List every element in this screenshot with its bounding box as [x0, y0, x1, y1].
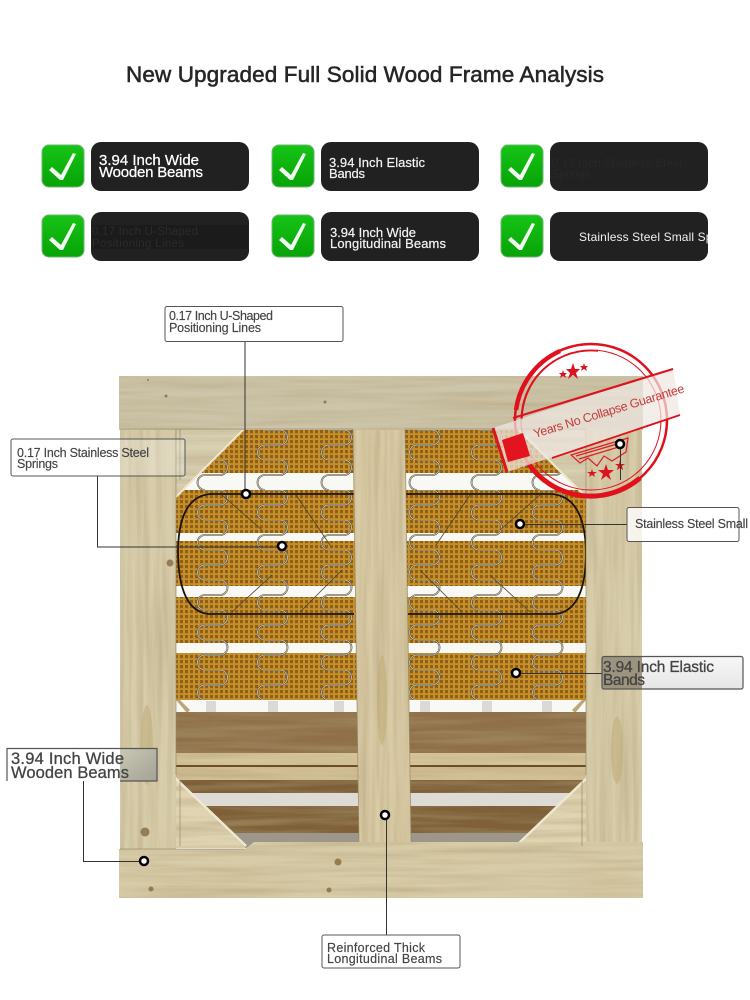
- callout: stainless steel springs: [11, 439, 286, 550]
- badge: 3.94 inch elastic bands: 3.94 Inch Elastic: [329, 155, 426, 170]
- stamp stars: [559, 363, 625, 480]
- interior: white gaps: [175, 429, 587, 713]
- stamp rings: [515, 344, 667, 496]
- callout: elastic bands: 3.94 Inch Elastic: [603, 659, 714, 676]
- feature badges: [42, 142, 739, 261]
- badge: 3.94 inch wide longitudinal beams: [272, 212, 479, 261]
- top beam: [119, 376, 643, 430]
- center longitudinal beam: [353, 429, 411, 842]
- callout: stainless steel springs: Springs: [17, 457, 58, 471]
- badge: 3.94 inch wide longitudinal beams: Longitudinal Beams: [330, 236, 446, 251]
- callout: u-shaped positioning lines: [165, 306, 343, 498]
- callout: stainless steel springs: 0.17 Inch Stainless Steel: [17, 446, 149, 460]
- badge: 3.94 inch wide wooden beams: Wooden Beams: [99, 164, 203, 181]
- top corner braces: [173, 429, 587, 498]
- callout: elastic bands: [512, 656, 743, 689]
- callout: stainless steel small springs: Stainless Steel Small: [635, 517, 748, 531]
- callout: u-shaped positioning lines: 0.17 Inch U-Shaped: [169, 309, 273, 323]
- badge: stainless steel springs (dim text): [501, 142, 708, 191]
- left post: [120, 429, 176, 849]
- wood joints and grain marks: [120, 429, 586, 849]
- callout: wooden beams: [7, 748, 157, 865]
- wood cathedral grain: [141, 655, 623, 785]
- bottom corner braces: [172, 775, 590, 848]
- callout: wooden beams: Wooden Beams: [11, 764, 129, 782]
- callout: u-shaped positioning lines: Positioning Lines: [169, 321, 261, 335]
- wood frame photo: [119, 376, 643, 898]
- badge: u-shaped positioning lines (dim text): Positioning Lines: [92, 238, 184, 250]
- right post: [586, 429, 642, 849]
- interior: spring clips: [206, 701, 552, 712]
- stamp ribbon fold: [571, 438, 628, 466]
- interior: lower back boards: [175, 712, 587, 848]
- badge: 3.94 inch elastic bands: Bands: [329, 166, 366, 181]
- stamp text: Years No Collapse Guarantee: [532, 382, 686, 441]
- badge: 3.94 inch wide wooden beams: 3.94 Inch Wide: [99, 152, 199, 169]
- title: New Upgraded Full Solid Wood Frame Analysis: [126, 62, 604, 87]
- callout: reinforced longitudinal beams: [322, 811, 460, 968]
- interior: small tension springs: [222, 495, 540, 612]
- badge: 3.94 inch wide wooden beams: [42, 142, 249, 191]
- interior: orange elastic bands: [176, 430, 586, 700]
- badge: stainless steel small springs: Stainless Steel Small Springs: [579, 230, 739, 244]
- callout: stainless steel small springs: [516, 508, 748, 542]
- badge: 3.94 inch wide longitudinal beams: 3.94 Inch Wide: [330, 225, 416, 240]
- badge: u-shaped positioning lines (dim text): [42, 212, 249, 261]
- callout: wooden beams: 3.94 Inch Wide: [11, 750, 124, 768]
- callout: reinforced longitudinal beams: Longitudinal Beams: [327, 952, 442, 966]
- red guarantee stamp: [493, 344, 686, 496]
- callout: reinforced longitudinal beams: Reinforced Thick: [327, 941, 426, 955]
- bottom beam: [119, 842, 643, 898]
- interior: serpentine springs: [196, 430, 565, 700]
- badge: stainless steel springs (dim text): Springs: [552, 169, 590, 181]
- wood knots: [140, 379, 342, 892]
- badge: 3.94 inch elastic bands: [272, 142, 479, 191]
- badge: u-shaped positioning lines (dim text): 0.17 Inch U-Shaped: [92, 226, 198, 238]
- marker: stamp pointer: [616, 440, 624, 480]
- interior: small lower braces: [176, 700, 586, 713]
- stamp banner: [493, 368, 680, 472]
- interior: u-shaped positioning line: [178, 494, 586, 614]
- stamp red block: [502, 433, 530, 462]
- callout: elastic bands: Bands: [603, 672, 645, 689]
- badge: stainless steel small springs: [500, 212, 708, 261]
- badge: stainless steel springs (dim text): 0.17 Inch Stainless Steel: [552, 158, 682, 170]
- stamp banner edges: [493, 369, 680, 472]
